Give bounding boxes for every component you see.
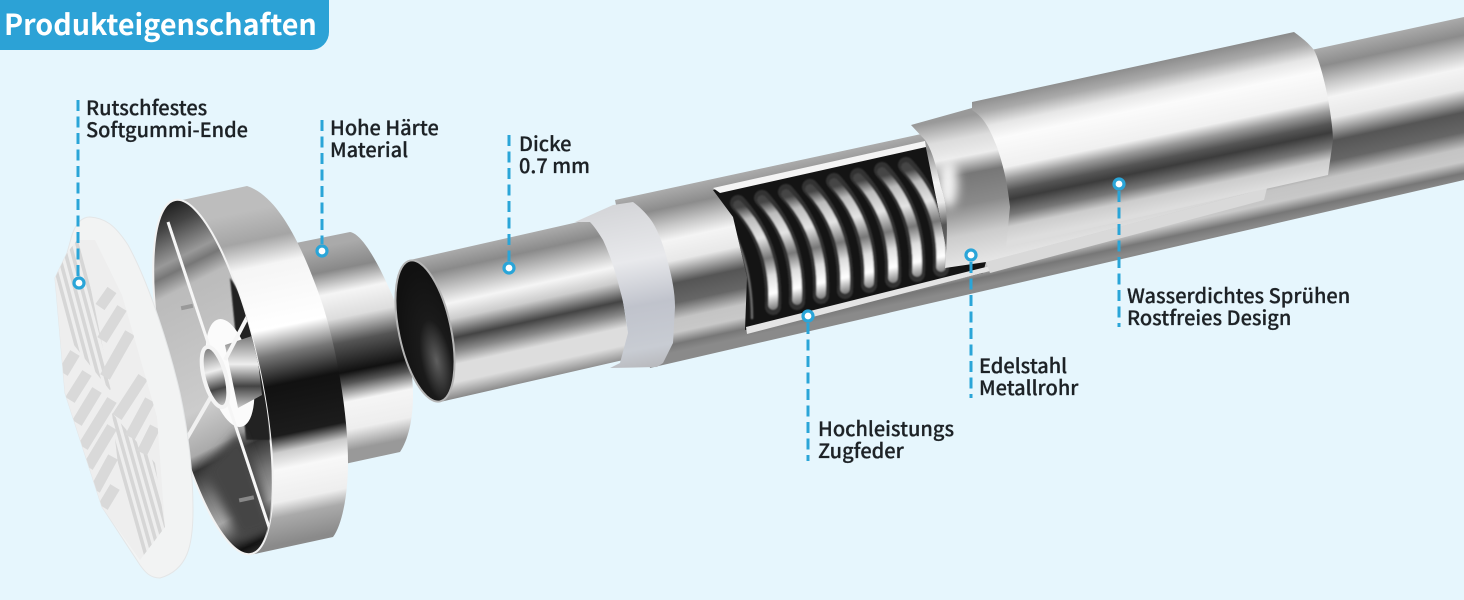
callout: tension spring: Hochleistungs xyxy=(818,413,954,442)
callout: hard material: Material xyxy=(330,134,408,163)
callout: hard material xyxy=(317,112,439,256)
callout: thickness: 0.7 mm xyxy=(519,150,590,179)
callout: rubber end: Softgummi-Ende xyxy=(86,114,248,143)
inner tube xyxy=(385,218,632,407)
rod end: neck cylinder xyxy=(296,232,413,465)
middle collar xyxy=(911,100,1267,268)
callout: thickness xyxy=(504,128,590,273)
callout: waterproof coating: Wasserdichtes Sprühen xyxy=(1127,280,1350,309)
callout: thickness: Dicke xyxy=(519,128,571,157)
title badge: Produkteigenschaften xyxy=(4,3,317,44)
callout: stainless steel tube xyxy=(966,250,1079,401)
callout: stainless steel tube: Edelstahl xyxy=(979,350,1067,379)
rubber gasket xyxy=(48,217,193,578)
window rails xyxy=(713,141,926,193)
rod end: metal cup xyxy=(152,186,348,555)
callout: tension spring: Zugfeder xyxy=(818,435,905,464)
large outer sleeve xyxy=(972,32,1333,247)
lower strip under sleeves xyxy=(986,188,1267,273)
callout: waterproof coating xyxy=(1114,179,1350,331)
spring window xyxy=(713,141,990,334)
collar highlight xyxy=(938,160,958,208)
spring coils xyxy=(730,165,941,318)
transparent ring xyxy=(575,202,675,368)
callout: stainless steel tube: Metallrohr xyxy=(979,372,1079,401)
long outer tube xyxy=(615,17,1464,368)
callout: waterproof coating: Rostfreies Design xyxy=(1127,302,1291,331)
callout: rubber end: Rutschfestes xyxy=(86,92,207,121)
callout: hard material: Hohe Härte xyxy=(330,112,439,141)
callout: rubber end xyxy=(74,92,248,288)
callout: tension spring xyxy=(803,311,954,464)
